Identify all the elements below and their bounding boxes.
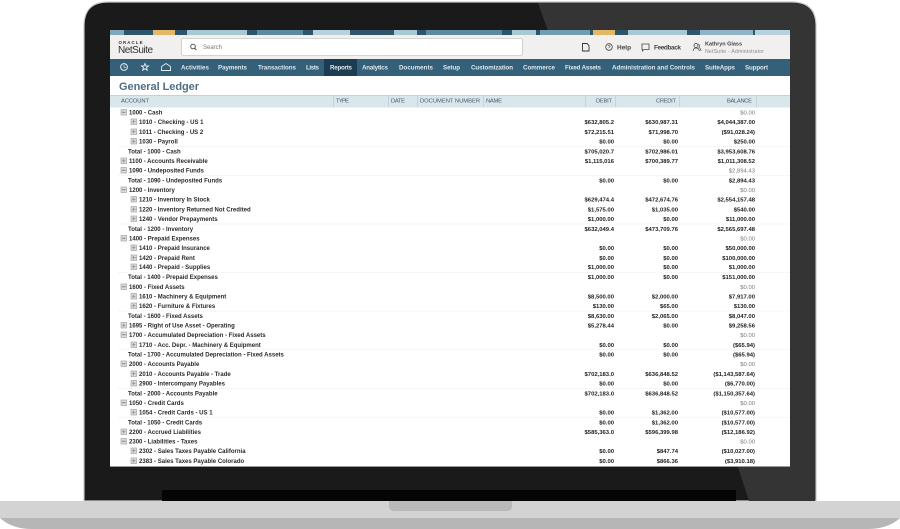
- total 2000: Total - 2000 - Accounts Payable: [128, 392, 218, 398]
- row 1440: [131, 264, 756, 271]
- user menu: [693, 42, 764, 55]
- logo: Oracle NetSuite: [118, 40, 153, 56]
- row 1054: $1,362.00: [652, 410, 679, 416]
- row 1410: $0.00: [599, 246, 615, 252]
- row 1710: $0.00: [663, 343, 679, 349]
- row 2200: 2200 - Accrued Liabilities: [129, 430, 202, 436]
- row 1695: [121, 322, 756, 330]
- row 1420: 1420 - Prepaid Rent: [139, 256, 195, 262]
- row 2383: $866.36: [657, 459, 679, 465]
- total 1200: $473,709.76: [645, 227, 679, 233]
- menu labels: Fixed Assets: [565, 64, 602, 72]
- row 1054: ($10,577.00): [722, 410, 755, 416]
- menu labels: Activities: [181, 64, 210, 72]
- total 1000: Total - 1000 - Cash: [128, 150, 181, 156]
- menu labels: Payments: [218, 64, 248, 72]
- row 1200: 1200 - Inventory: [129, 188, 175, 194]
- row 1695: $0.00: [663, 324, 679, 330]
- row 1050: [121, 400, 756, 407]
- row 2900: 2900 - Intercompany Payables: [139, 382, 226, 388]
- row 1010: $4,044,387.00: [717, 120, 756, 126]
- row 1440: 1440 - Prepaid - Supplies: [139, 265, 211, 271]
- row 2300: $0.00: [740, 440, 756, 446]
- icon: home: [162, 64, 170, 70]
- row 2383: $0.00: [599, 459, 615, 465]
- table column headers: DOCUMENT NUMBER: [420, 98, 480, 104]
- row 1240: 1240 - Vendor Prepayments: [139, 217, 218, 223]
- decorative top strip: [110, 30, 790, 35]
- row 1100: $1,011,308.52: [718, 159, 756, 165]
- row 2010: [131, 371, 755, 378]
- row 1620: 1620 - Furniture & Fixtures: [139, 304, 216, 310]
- help button: Help: [617, 44, 631, 52]
- total 1200: Total - 1200 - Inventory: [128, 227, 194, 233]
- total 1090: Total - 1090 - Undeposited Funds: [128, 178, 223, 184]
- total 1200: [119, 224, 790, 233]
- total 1400: $0.00: [663, 275, 679, 281]
- row 1210: $629,474.4: [585, 198, 615, 204]
- row 1011: [131, 129, 755, 136]
- row 2300: 2300 - Liabilities - Taxes: [129, 440, 198, 446]
- navigation bar: [110, 59, 790, 76]
- row 1220: $540.00: [734, 208, 756, 214]
- total 1600: [119, 311, 790, 320]
- row 1090: [121, 168, 756, 174]
- total 1090: $2,894.43: [729, 178, 756, 184]
- row 2010: $636,848.52: [645, 372, 679, 378]
- row 1030: [131, 138, 756, 146]
- row 1400: 1400 - Prepaid Expenses: [129, 236, 200, 242]
- total 1400: [119, 272, 790, 281]
- row 1000: 1000 - Cash: [129, 110, 163, 116]
- row 1011: $71,998.70: [649, 130, 679, 136]
- menu labels: Analytics: [362, 64, 389, 72]
- user menu: Kathryn Glass: [705, 42, 742, 48]
- row 1210: $472,674.76: [645, 198, 679, 204]
- row 2383: [131, 458, 755, 465]
- row 1420: $0.00: [599, 256, 615, 262]
- total 1000: [119, 146, 790, 156]
- total 1050: $0.00: [599, 420, 615, 426]
- total 1700: $0.00: [599, 352, 615, 358]
- row 2010: ($1,143,587.64): [713, 372, 755, 378]
- row 2900: [131, 380, 755, 388]
- row 2302: $847.74: [657, 449, 679, 455]
- row 1710: [131, 342, 755, 349]
- row 2010: 2010 - Accounts Payable - Trade: [139, 372, 231, 378]
- row 1710: $0.00: [599, 343, 615, 349]
- row 2302: $0.00: [599, 449, 615, 455]
- row 1200: [121, 187, 756, 194]
- total 1600: $8,047.00: [729, 314, 756, 320]
- menu labels: Transactions: [258, 64, 297, 72]
- row 1410: 1410 - Prepaid Insurance: [139, 246, 211, 252]
- ledger rows: [119, 110, 790, 465]
- row 1600: [121, 284, 756, 291]
- feedback button: [642, 44, 681, 52]
- total 1600: $2,065.00: [652, 314, 679, 320]
- row 1410: $0.00: [663, 246, 679, 252]
- total 1700: ($65.94): [733, 352, 755, 358]
- row 2010: $702,183.0: [585, 372, 615, 378]
- row 2000: $0.00: [740, 362, 756, 368]
- row 1054: [131, 410, 755, 416]
- row 1000: $0.00: [740, 110, 756, 116]
- row 2200: [121, 429, 755, 436]
- row 1100: 1100 - Accounts Receivable: [129, 159, 208, 165]
- menu labels: Lists: [306, 64, 320, 72]
- row 1420: $100,000.00: [722, 256, 756, 262]
- row 1695: $9,258.56: [729, 324, 756, 330]
- total 1050: [119, 418, 790, 426]
- total 1700: [119, 350, 790, 358]
- row 1090: 1090 - Undeposited Funds: [129, 168, 205, 174]
- row 1710: ($65.94): [733, 343, 755, 349]
- total 1050: Total - 1050 - Credit Cards: [128, 420, 203, 426]
- table column headers: DEBIT: [596, 98, 612, 104]
- title: General Ledger: [119, 81, 200, 93]
- row 1210: [131, 196, 756, 204]
- row 1100: [121, 158, 756, 165]
- row 1440: $1,000.00: [729, 265, 756, 271]
- total 2000: $636,848.52: [645, 392, 679, 398]
- row 1695: 1695 - Right of Use Asset - Operating: [129, 324, 235, 330]
- row 1400: [121, 236, 756, 242]
- total 1050: ($10,577.00): [722, 420, 755, 426]
- laptop lid bezel: [84, 2, 816, 501]
- row 2383: ($3,910.18): [725, 459, 755, 465]
- row 1240: [131, 216, 756, 223]
- row 1600: 1600 - Fixed Assets: [129, 285, 185, 291]
- table column headers: DATE: [391, 98, 405, 104]
- help button: [606, 44, 631, 52]
- row 1030: $250.00: [734, 140, 756, 146]
- row 1420: [131, 255, 756, 262]
- menu labels: Support: [745, 64, 768, 72]
- logo: Oracle NetSuite: NetSuite: [118, 45, 153, 56]
- row 2383: 2383 - Sales Taxes Payable Colorado: [139, 459, 245, 465]
- row 1011: 1011 - Checking - US 2: [139, 130, 204, 136]
- row 1240: $1,000.00: [588, 217, 615, 223]
- menu labels: Setup: [443, 64, 460, 72]
- row 1100: $1,115,016: [585, 159, 615, 165]
- row 1210: 1210 - Inventory In Stock: [139, 198, 211, 204]
- row 1610: $7,917.00: [729, 294, 756, 300]
- row 1011: ($91,028.24): [722, 130, 755, 136]
- row 2300: [121, 438, 756, 446]
- table column headers: NAME: [486, 98, 502, 104]
- total 1090: [119, 176, 790, 184]
- total 1200: $632,049.4: [585, 227, 615, 233]
- row 1700: $0.00: [740, 333, 756, 339]
- total 1600: Total - 1600 - Fixed Assets: [128, 314, 204, 320]
- table column headers: CREDIT: [656, 98, 676, 104]
- row 1010: 1010 - Checking - US 1: [139, 120, 204, 126]
- row 1410: [131, 245, 756, 252]
- row 1695: $5,278.44: [588, 324, 615, 330]
- row 2900: $0.00: [663, 382, 679, 388]
- total 1050: $1,362.00: [652, 420, 679, 426]
- total 1400: $1,000.00: [588, 275, 615, 281]
- row 1100: $700,389.77: [645, 159, 679, 165]
- row 1420: $0.00: [663, 256, 679, 262]
- total 1000: $702,986.01: [645, 150, 679, 156]
- row 1620: [131, 303, 756, 310]
- row 1400: $0.00: [740, 236, 756, 242]
- total 1090: $0.00: [599, 178, 615, 184]
- total 1600: $8,630.00: [588, 314, 615, 320]
- row 1220: $1,035.00: [652, 208, 679, 214]
- row 1410: $50,000.00: [726, 246, 756, 252]
- row 1010: [131, 119, 756, 126]
- row 1050: $0.00: [740, 401, 756, 407]
- row 2900: ($6,770.00): [725, 382, 755, 388]
- search box: [182, 38, 522, 56]
- total 1200: $2,565,697.48: [717, 227, 756, 233]
- row 2200: ($12,186.92): [722, 430, 755, 436]
- row 1200: $0.00: [740, 188, 756, 194]
- icon: star: [142, 64, 148, 70]
- row 1010: $630,987.31: [645, 120, 679, 126]
- row 1054: 1054 - Credit Cards - US 1: [139, 410, 213, 416]
- menu labels: Customization: [471, 64, 513, 72]
- menu labels: [181, 64, 768, 72]
- search box: Search: [203, 45, 222, 51]
- row 1220: [131, 206, 756, 214]
- total 2000: $702,183.0: [585, 392, 615, 398]
- row 1620: $130.00: [593, 304, 615, 310]
- row 2000: [121, 361, 756, 368]
- total 1400: Total - 1400 - Prepaid Expenses: [128, 275, 218, 281]
- row 1620: $65.00: [660, 304, 679, 310]
- feedback button: Feedback: [654, 44, 681, 52]
- screen: [110, 30, 790, 467]
- total 1700: $0.00: [663, 352, 679, 358]
- row 1210: $2,554,157.48: [717, 198, 756, 204]
- menu labels: Commerce: [523, 64, 556, 72]
- table column headers: [110, 95, 790, 108]
- table column headers: ACCOUNT: [121, 98, 149, 104]
- row 1010: $632,805.2: [585, 120, 615, 126]
- total 1700: Total - 1700 - Accumulated Depreciation - Fixed Assets: [128, 352, 285, 358]
- row 1030: $0.00: [663, 140, 679, 146]
- table column headers: BALANCE: [727, 98, 752, 104]
- row 1090: $2,894.43: [729, 168, 756, 174]
- row 1011: $72,215.51: [585, 130, 615, 136]
- menu labels: Documents: [399, 64, 434, 72]
- row 2302: ($10,027.00): [722, 449, 755, 455]
- user menu: NetSuite - Administrator: [705, 49, 764, 55]
- row 2000: 2000 - Accounts Payable: [129, 362, 200, 368]
- row 1610: $2,000.00: [652, 294, 679, 300]
- row 2302: 2302 - Sales Taxes Payable California: [139, 449, 246, 455]
- row 1220: 1220 - Inventory Returned Not Credited: [139, 208, 251, 214]
- row 1710: 1710 - Acc. Depr. - Machinery & Equipment: [139, 343, 261, 349]
- total 1000: $705,020.7: [585, 150, 615, 156]
- row 2302: [131, 448, 755, 455]
- row 1240: $0.00: [663, 217, 679, 223]
- row 1050: 1050 - Credit Cards: [129, 401, 184, 407]
- icon: recent clock: [121, 64, 127, 70]
- row 1030: $0.00: [599, 140, 615, 146]
- row 1440: $0.00: [663, 265, 679, 271]
- row 1030: 1030 - Payroll: [139, 140, 178, 146]
- row 2200: $596,399.98: [645, 430, 679, 436]
- row 1440: $1,000.00: [588, 265, 615, 271]
- row 1610: [131, 294, 756, 300]
- laptop base: [0, 501, 900, 529]
- row 1600: $0.00: [740, 285, 756, 291]
- row 2900: $0.00: [599, 382, 615, 388]
- logo: Oracle NetSuite: ORACLE: [118, 40, 143, 45]
- row 1000: [121, 110, 756, 116]
- total 1400: $151,000.00: [722, 275, 756, 281]
- row 1240: $11,000.00: [726, 217, 756, 223]
- table column headers: TYPE: [336, 98, 349, 104]
- total 2000: [119, 388, 790, 398]
- row 1054: $0.00: [599, 410, 615, 416]
- total 1000: $3,953,608.76: [717, 150, 756, 156]
- row 2200: $585,363.0: [585, 430, 615, 436]
- row 1610: 1610 - Machinery & Equipment: [139, 294, 226, 300]
- row 1220: $1,575.00: [588, 208, 615, 214]
- row 1700: [121, 332, 756, 339]
- menu labels: Administration and Controls: [612, 64, 696, 72]
- menu labels: Reports: [330, 64, 353, 72]
- row 1620: $130.00: [734, 304, 756, 310]
- row 1610: $8,500.00: [588, 294, 615, 300]
- icon: new document: [582, 44, 589, 51]
- menu labels: SuiteApps: [705, 64, 736, 72]
- total 1090: $0.00: [663, 178, 679, 184]
- top header bar: [110, 35, 790, 59]
- total 2000: ($1,150,357.64): [713, 392, 755, 398]
- row 1700: 1700 - Accumulated Depreciation - Fixed Assets: [129, 333, 266, 339]
